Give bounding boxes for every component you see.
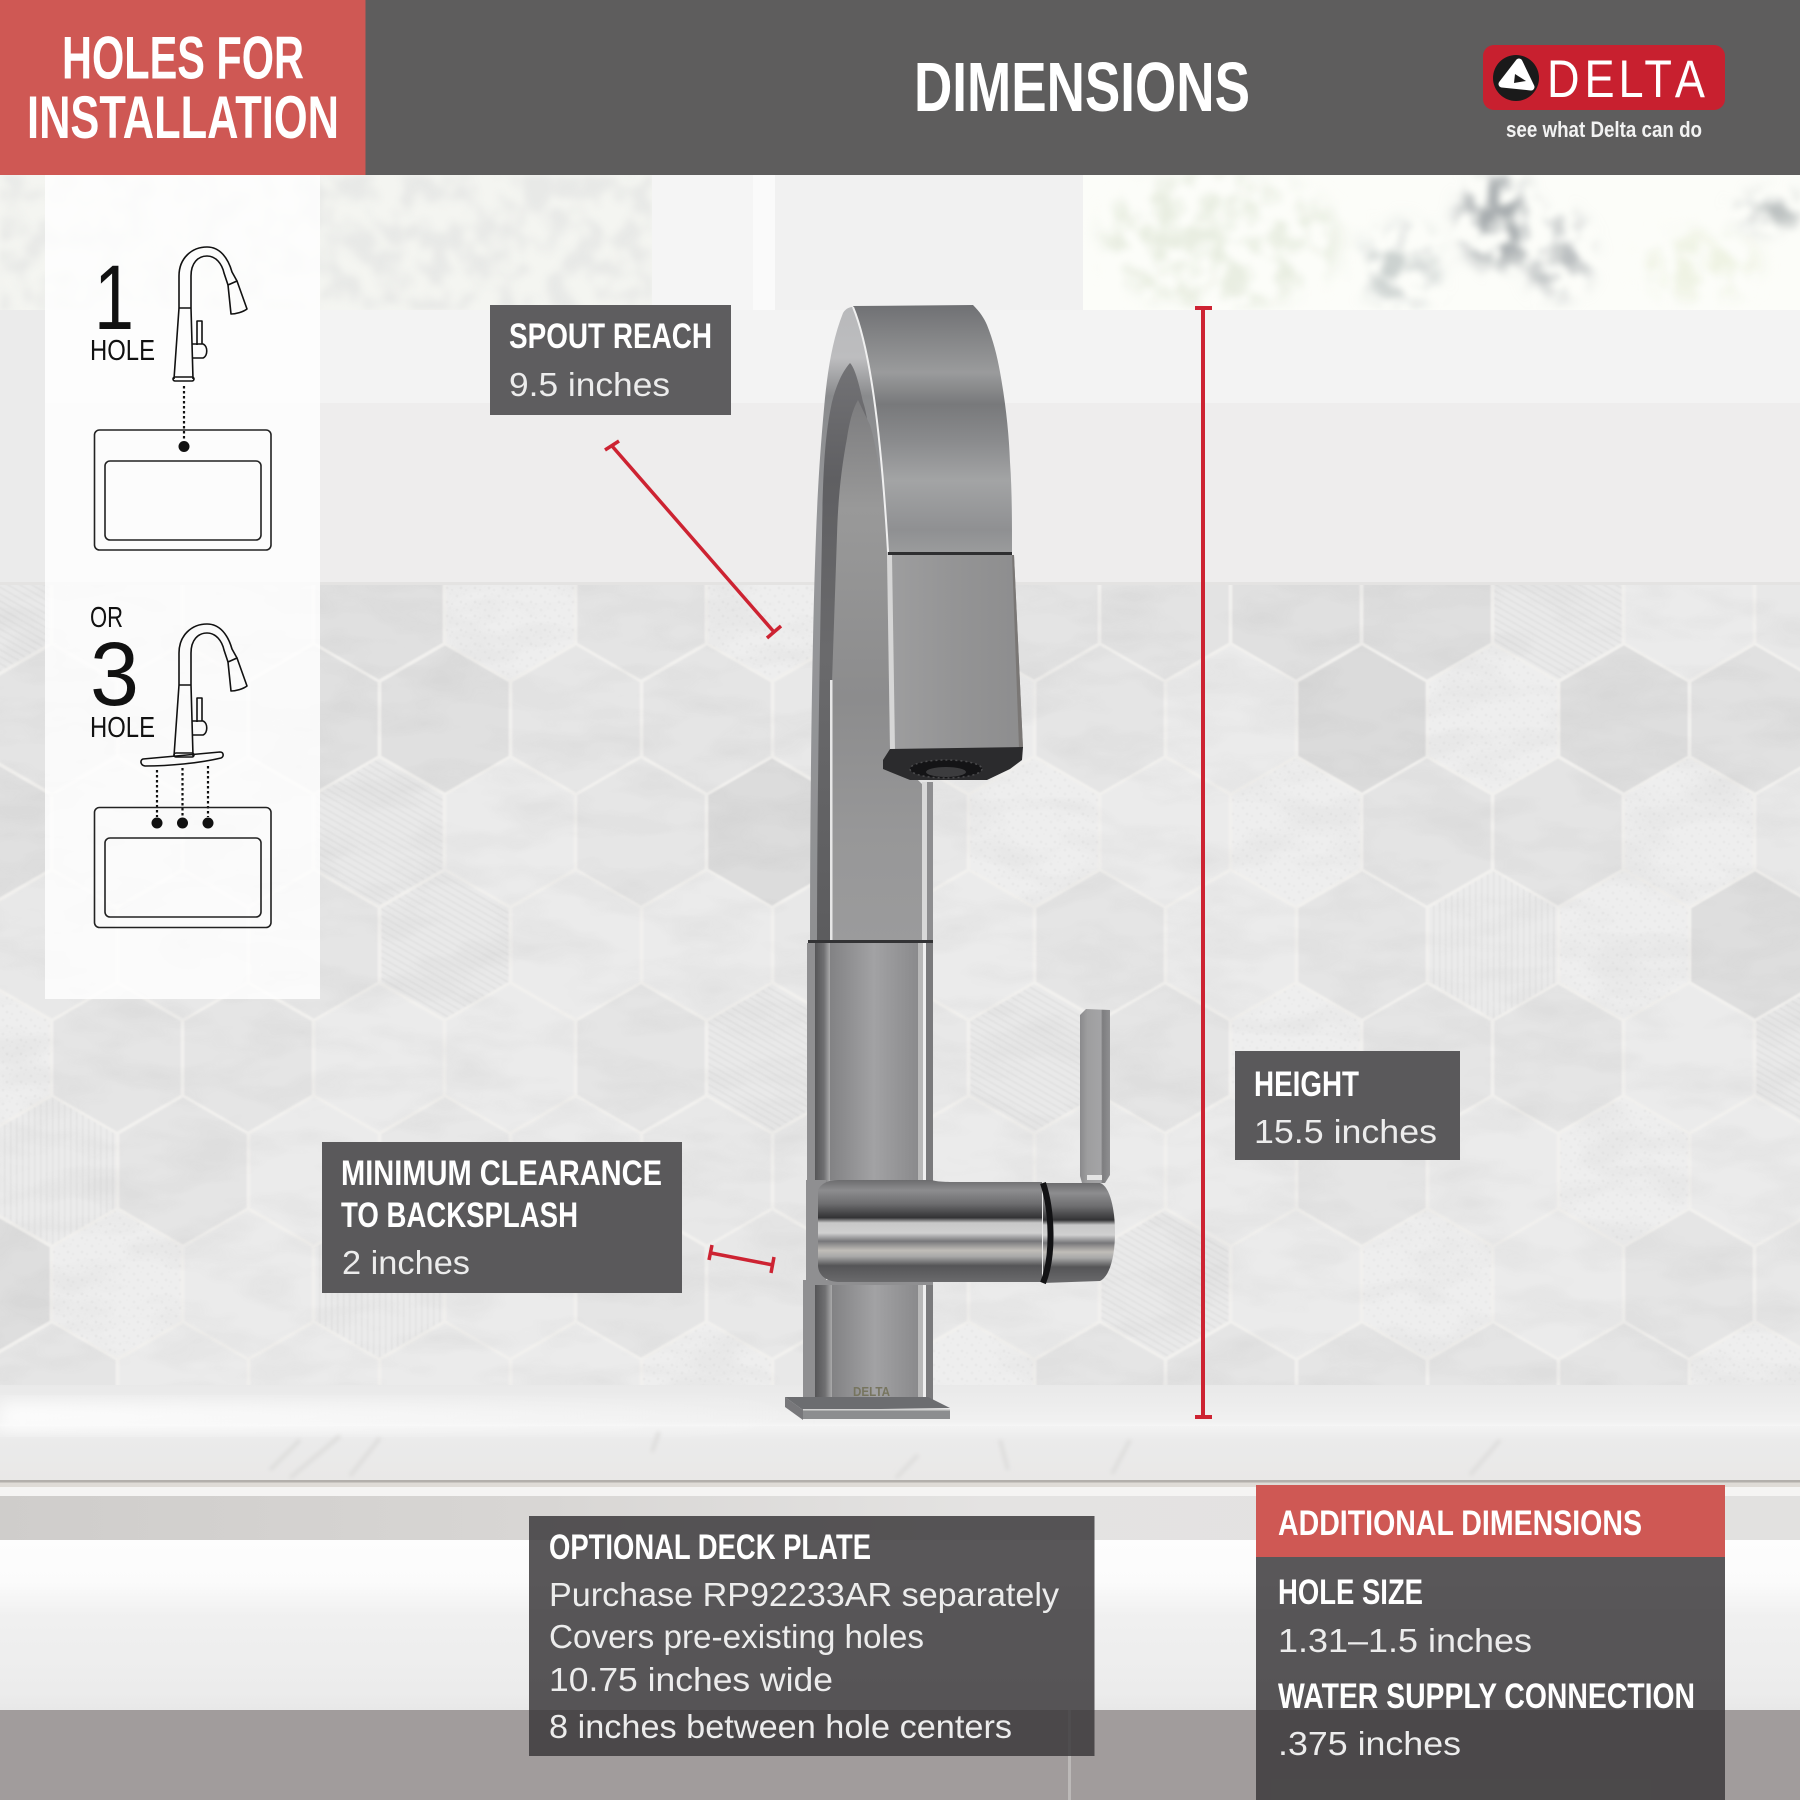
title: dimensions: DIMENSIONS [914, 48, 1250, 126]
panel heading: ADDITIONAL DIMENSIONS [1278, 1504, 1642, 1543]
callout: height: 15.5 inches [1254, 1113, 1437, 1150]
stem brushed panel [830, 943, 918, 1180]
header bar [0, 0, 1800, 175]
callout: optional deck plate: OPTIONAL DECK PLATE [549, 1528, 871, 1567]
callout: minimum clearance: TO BACKSPLASH [341, 1196, 578, 1235]
faucet [785, 305, 1115, 1420]
callout: optional deck plate [529, 1516, 1094, 1756]
panel: additional dimensions: HOLE SIZE [1278, 1573, 1423, 1612]
panel: installation hole options [45, 175, 320, 999]
callout: height [1235, 1051, 1460, 1160]
stem edge highlight [830, 680, 832, 942]
icon: faucet line drawing [173, 247, 247, 381]
icon: faucet with deck plate [141, 624, 247, 766]
Delta logo [1483, 45, 1725, 142]
panel: additional dimensions: 1.31–1.5 inches [1278, 1622, 1532, 1659]
arch ring surface [810, 307, 933, 942]
deck base plate [785, 1397, 950, 1420]
three hole option [90, 602, 271, 928]
Delta logo: DELTA [1547, 50, 1705, 109]
callout: spout reach: SPOUT REACH [509, 317, 712, 356]
lower brushed panel with maker mark [832, 1285, 918, 1405]
dimension line: spout reach [605, 441, 781, 638]
callout: minimum clearance [322, 1142, 682, 1293]
icon: sink outline [94, 430, 271, 550]
horizontal handle cylinder [818, 1180, 1042, 1282]
lever handle [1080, 1009, 1110, 1183]
callout: optional deck plate: 8 inches between hole centers [549, 1708, 1012, 1745]
handle cap [1043, 1183, 1115, 1283]
base of faucet body [803, 1180, 933, 1403]
callout: minimum clearance: MINIMUM CLEARANCE [341, 1154, 662, 1193]
panel: additional dimensions: .375 inches [1278, 1725, 1461, 1762]
panel: additional dimensions [1256, 1485, 1725, 1800]
three hole option: 3 [90, 625, 139, 725]
red heading panel: holes for installation: HOLES FOR [62, 24, 304, 92]
three hole option: HOLE [90, 712, 155, 744]
callout: optional deck plate: Purchase RP92233AR separately [549, 1576, 1060, 1613]
dotted connectors and holes [152, 766, 214, 828]
background: window sill [0, 310, 1800, 585]
lower stem [807, 943, 933, 1183]
callout: spout reach: 9.5 inches [509, 366, 670, 403]
red heading panel: holes for installation: INSTALLATION [27, 84, 339, 151]
sprayer nozzle [883, 747, 1023, 780]
dimension line: backsplash clearance [709, 1245, 774, 1273]
Delta logo: see what Delta can do [1506, 117, 1702, 142]
callout: minimum clearance: 2 inches [342, 1244, 470, 1281]
background: hexagon tile backsplash [0, 532, 1800, 1470]
three hole option: OR [90, 602, 123, 634]
callout: optional deck plate: Covers pre-existing holes [549, 1618, 924, 1655]
lower brushed panel with maker mark: DELTA [853, 1384, 891, 1399]
spout edge highlight [853, 307, 888, 552]
icon: sink outline [94, 808, 271, 928]
arch opening, dark underside [817, 363, 880, 942]
panel: additional dimensions: WATER SUPPLY CONNECTION [1278, 1677, 1695, 1716]
background: kitchen window and foliage [0, 170, 1800, 315]
dimension line: height [1195, 306, 1212, 1419]
one hole option [90, 247, 271, 550]
stem right highlight [922, 782, 933, 942]
spout top band [853, 305, 1012, 552]
seam between spout and sprayer [888, 552, 1012, 555]
one hole option: HOLE [90, 335, 155, 367]
callout: spout reach [490, 305, 731, 415]
pull-down sprayer head [887, 555, 1023, 750]
panel heading [1256, 1485, 1725, 1557]
red heading panel: holes for installation [0, 0, 366, 175]
seam between stem sections [808, 940, 933, 943]
callout: optional deck plate: 10.75 inches wide [549, 1661, 833, 1698]
background: marble countertop and cabinet [0, 1385, 1800, 1800]
one hole option: 1 [94, 247, 134, 349]
dotted connector and hole [178, 386, 190, 452]
arch inner lit surface [832, 400, 922, 942]
callout: height: HEIGHT [1254, 1065, 1359, 1104]
